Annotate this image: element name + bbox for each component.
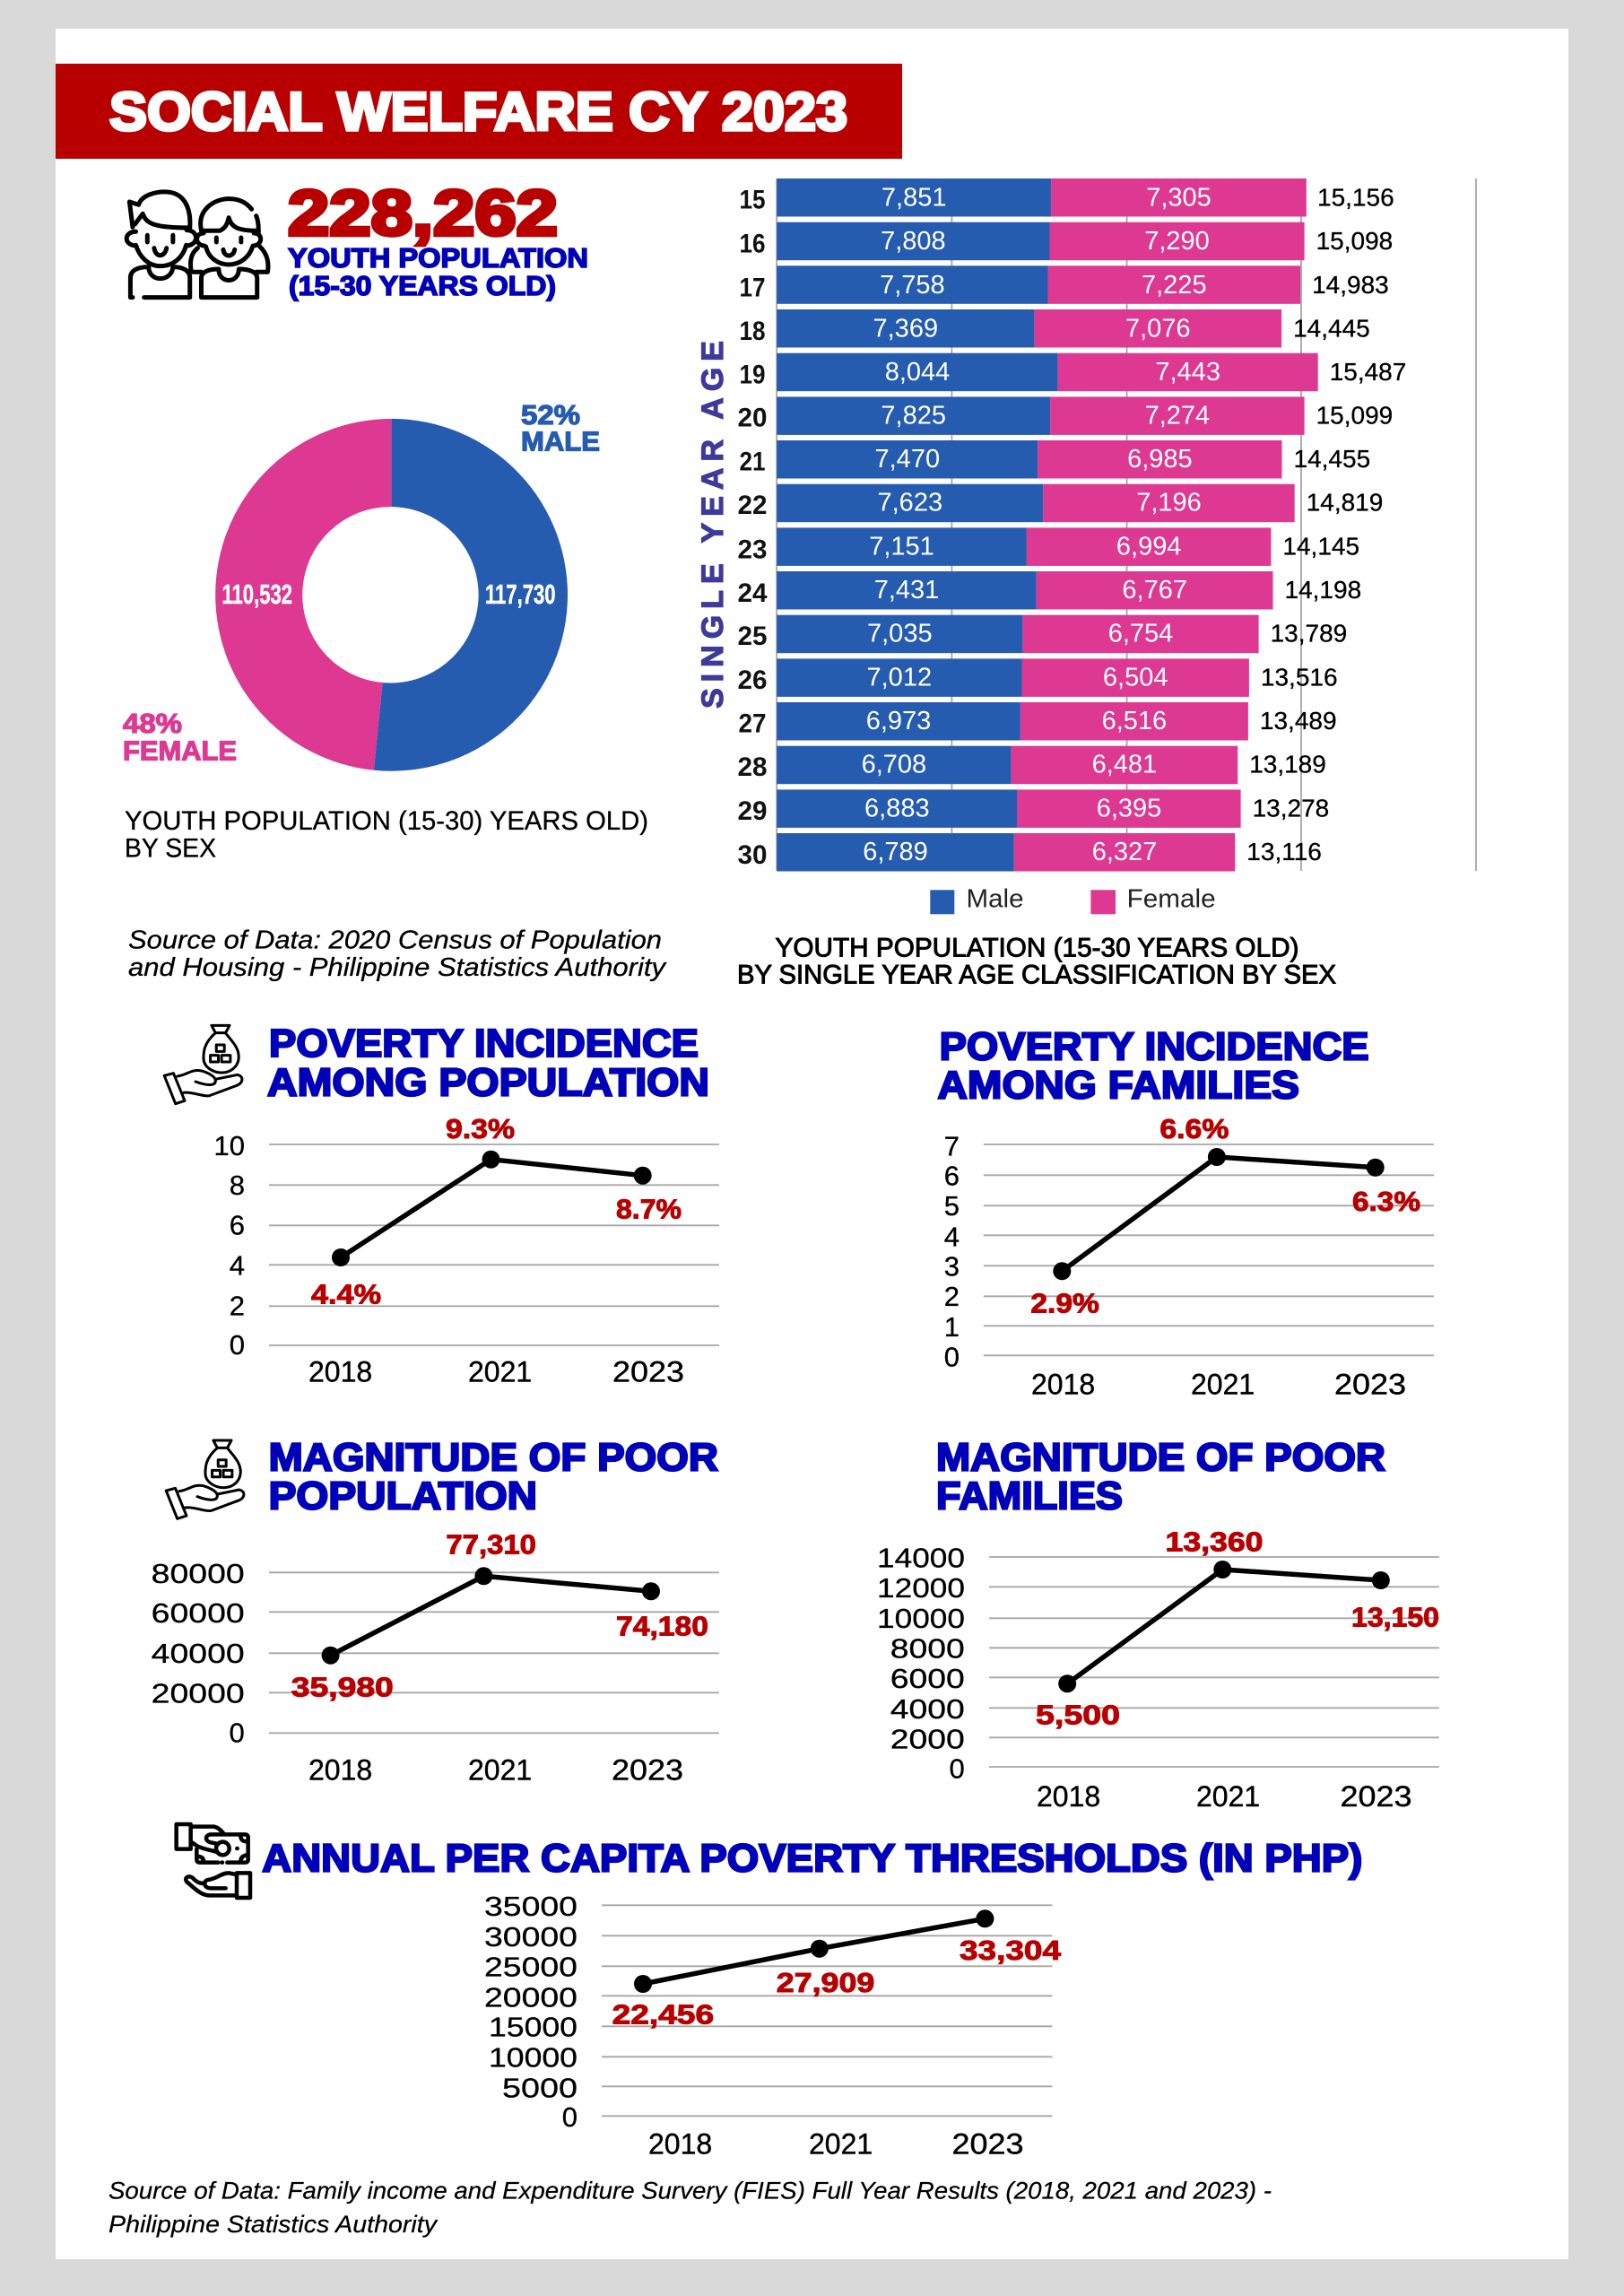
title banner: SOCIAL WELFARE CY 2023 — [109, 82, 847, 142]
heading: POPULATION — [269, 1474, 537, 1518]
data line — [1058, 1561, 1390, 1692]
bar chart legend — [930, 884, 1216, 914]
y axis labels: 35000 — [484, 1891, 578, 1922]
donut chart: youth population by sex — [215, 419, 568, 771]
female segment — [215, 419, 391, 770]
x axis labels — [1031, 1368, 1406, 1400]
age 23: 23 — [737, 535, 768, 564]
y axis labels: 0 — [944, 1341, 960, 1372]
data labels: 2.9% — [1030, 1287, 1099, 1318]
age 18: 14,445 — [1293, 314, 1370, 343]
age 29: 6,395 — [1097, 794, 1161, 822]
data line — [322, 1567, 660, 1665]
heading — [938, 1025, 1369, 1107]
age 22 — [737, 484, 1383, 522]
x axis labels: 2023 — [1334, 1368, 1406, 1400]
x axis labels: 2021 — [1196, 1780, 1260, 1813]
age 21: 7,470 — [875, 445, 940, 474]
x axis labels: 2021 — [468, 1753, 532, 1786]
data labels: 27,909 — [777, 1967, 874, 1998]
y axis labels: 5 — [944, 1190, 960, 1222]
y axis labels: 10000 — [489, 2042, 578, 2074]
y axis labels: 20000 — [152, 1677, 245, 1709]
female value: 110,532 — [222, 578, 292, 610]
age 26: 26 — [737, 665, 768, 695]
age 15: 15,156 — [1317, 183, 1394, 212]
bar chart legend: Male — [967, 884, 1024, 913]
y axis labels: 6 — [944, 1161, 960, 1192]
y axis labels: 14000 — [877, 1543, 965, 1574]
age 29: 13,278 — [1253, 794, 1329, 822]
age 28: 13,189 — [1249, 751, 1326, 778]
data labels: 4.4% — [311, 1278, 381, 1309]
y axis labels: 2 — [230, 1291, 245, 1322]
age 30 — [737, 833, 1322, 872]
x axis labels: 2018 — [648, 2128, 712, 2161]
data labels: 13,150 — [1351, 1601, 1439, 1632]
age 25: 7,035 — [867, 620, 933, 648]
x axis labels: 2023 — [1340, 1780, 1411, 1813]
y axis labels: 4 — [944, 1221, 960, 1252]
age 30: 6,789 — [863, 838, 928, 866]
age 16: 16 — [739, 230, 766, 259]
age 19 — [739, 353, 1406, 391]
icon: hand holding money bag (magnitude) — [166, 1440, 244, 1518]
age 22: 22 — [737, 491, 768, 520]
age 25 — [737, 615, 1347, 653]
age 19: 15,487 — [1330, 358, 1406, 386]
line chart: poverty incidence among families — [938, 1025, 1434, 1400]
age 20: 7,825 — [881, 402, 946, 430]
age 29 — [737, 789, 1329, 828]
donut label: male — [521, 399, 600, 457]
data labels — [1036, 1526, 1439, 1731]
line chart: magnitude of poor population — [152, 1436, 719, 1786]
age 28: 6,481 — [1092, 751, 1157, 779]
x axis labels — [648, 2128, 1024, 2161]
age 25: 6,754 — [1108, 620, 1173, 648]
x axis labels — [308, 1753, 683, 1786]
y axis labels: 25000 — [484, 1951, 578, 1982]
x axis labels: 2023 — [612, 1356, 684, 1388]
data labels: 35,980 — [291, 1672, 394, 1703]
age 28: 28 — [737, 752, 768, 782]
age 26: 13,516 — [1261, 663, 1338, 691]
age 15: 15 — [739, 186, 766, 215]
y axis labels: 2 — [944, 1281, 960, 1312]
icon: two youths — [126, 192, 268, 298]
age 29: 6,883 — [864, 794, 930, 822]
age 19: 7,443 — [1155, 358, 1220, 387]
y axis labels: 8 — [230, 1170, 245, 1201]
y axis labels: 0 — [950, 1752, 965, 1784]
y axis labels: 20000 — [484, 1981, 578, 2013]
data labels: 8.7% — [616, 1193, 682, 1224]
age 23: 7,151 — [869, 532, 934, 561]
axis title: single year age: SINGLE YEAR AGE — [696, 341, 730, 709]
age 15: 7,851 — [881, 183, 946, 212]
y axis labels: 10 — [214, 1130, 245, 1161]
heading: MAGNITUDE OF POOR — [936, 1436, 1385, 1480]
y axis labels: 2000 — [890, 1723, 965, 1754]
age 22: 7,196 — [1136, 489, 1202, 517]
age 23: 6,994 — [1116, 532, 1181, 561]
heading — [936, 1436, 1385, 1518]
total youth population figure: 228,262 — [288, 178, 558, 249]
x axis labels: 2018 — [308, 1753, 372, 1786]
data labels: 13,360 — [1166, 1526, 1263, 1557]
line chart: annual per capita poverty thresholds — [262, 1837, 1362, 2161]
donut label: male: 52% — [521, 399, 580, 430]
x axis labels: 2021 — [809, 2128, 873, 2161]
donut label: female: FEMALE — [123, 735, 237, 766]
icon: hands exchanging money — [177, 1824, 250, 1898]
age 17 — [739, 265, 1389, 304]
line chart: magnitude of poor families — [877, 1436, 1439, 1813]
x axis labels: 2021 — [468, 1356, 532, 1388]
age 17: 7,225 — [1142, 271, 1207, 300]
age 25: 25 — [737, 622, 768, 651]
age 27: 27 — [739, 709, 766, 739]
y axis labels: 6000 — [890, 1663, 965, 1694]
x axis labels: 2023 — [952, 2128, 1024, 2161]
bar chart caption: YOUTH POPULATION (15-30 YEARS OLD) — [775, 934, 1298, 963]
y axis labels: 0 — [229, 1718, 245, 1749]
bar chart caption — [737, 934, 1336, 990]
donut caption: BY SEX — [125, 834, 216, 863]
age 16 — [739, 222, 1393, 260]
age 24: 6,767 — [1122, 576, 1187, 604]
data labels: 74,180 — [616, 1610, 708, 1641]
age 28: 6,708 — [862, 751, 926, 779]
age 22: 14,819 — [1307, 489, 1383, 517]
y axis labels — [152, 1558, 245, 1749]
age 27: 6,973 — [866, 707, 931, 735]
heading: AMONG POPULATION — [267, 1060, 709, 1105]
age 25: 13,789 — [1271, 620, 1347, 648]
age 23 — [737, 527, 1359, 566]
data labels — [1030, 1113, 1420, 1318]
y axis labels: 15000 — [489, 2012, 578, 2043]
source note: FIES: Philippine Statistics Authority — [109, 2211, 439, 2238]
y axis labels: 12000 — [877, 1572, 965, 1604]
line chart: poverty incidence among population — [214, 1022, 719, 1388]
x axis labels: 2018 — [1037, 1780, 1100, 1813]
age 20: 20 — [737, 403, 768, 432]
age 28 — [737, 746, 1326, 784]
age 30: 13,116 — [1246, 838, 1322, 865]
age 20: 7,274 — [1145, 402, 1210, 430]
y axis labels: 4 — [230, 1250, 245, 1282]
data line — [332, 1151, 652, 1266]
y axis labels: 30000 — [484, 1921, 578, 1952]
y axis labels: 8000 — [890, 1632, 965, 1664]
heading: ANNUAL PER CAPITA POVERTY THRESHOLDS (IN PHP) — [262, 1837, 1362, 1881]
heading — [267, 1022, 709, 1105]
source note: census — [128, 926, 667, 982]
y axis labels: 40000 — [152, 1638, 245, 1669]
age 24 — [737, 571, 1361, 610]
source note: FIES — [109, 2178, 1272, 2238]
x axis labels: 2023 — [612, 1753, 683, 1786]
bar chart caption: BY SINGLE YEAR AGE CLASSIFICATION BY SEX — [737, 961, 1336, 990]
age 24: 24 — [737, 578, 768, 608]
y axis labels: 0 — [562, 2101, 578, 2133]
source note: census: and Housing - Philippine Statistics Authority — [128, 953, 667, 982]
age 16: 15,098 — [1316, 227, 1393, 255]
y axis labels — [944, 1130, 960, 1372]
age 18: 7,369 — [873, 314, 938, 343]
age 17: 7,758 — [880, 271, 945, 300]
y axis labels: 60000 — [152, 1597, 245, 1629]
data labels — [311, 1113, 682, 1309]
data line — [1053, 1148, 1385, 1280]
age 24: 7,431 — [874, 576, 939, 604]
age 27: 6,516 — [1102, 707, 1167, 735]
y axis labels: 5000 — [502, 2072, 578, 2103]
y axis labels — [484, 1891, 578, 2133]
male segment — [374, 419, 568, 771]
donut label: female: 48% — [123, 708, 182, 739]
y axis labels: 3 — [944, 1251, 960, 1283]
y axis labels: 80000 — [152, 1558, 245, 1589]
y axis labels — [214, 1130, 245, 1361]
title banner — [56, 64, 902, 159]
data labels: 6.6% — [1159, 1113, 1229, 1144]
age 15: 7,305 — [1146, 183, 1211, 212]
age 21: 6,985 — [1127, 445, 1193, 474]
age 30: 6,327 — [1092, 838, 1157, 866]
age 27 — [739, 702, 1337, 741]
age 18: 18 — [739, 317, 766, 346]
donut label: female — [123, 708, 237, 766]
data labels — [612, 1935, 1062, 2031]
age 24: 14,198 — [1284, 576, 1361, 604]
x axis labels — [1037, 1780, 1411, 1813]
donut caption: YOUTH POPULATION (15-30) YEARS OLD) — [125, 806, 648, 836]
y axis labels: 1 — [944, 1311, 960, 1343]
age 29: 29 — [737, 796, 768, 826]
age 26: 6,504 — [1103, 663, 1168, 691]
heading: AMONG FAMILIES — [938, 1063, 1299, 1107]
x axis labels: 2021 — [1191, 1368, 1255, 1400]
donut label: male: MALE — [521, 425, 600, 457]
age 16: 7,808 — [881, 227, 946, 256]
youth population caption — [288, 242, 588, 301]
age 19: 8,044 — [885, 358, 950, 387]
age 30: 30 — [737, 840, 768, 870]
age 21: 21 — [739, 447, 766, 477]
source note: FIES: Source of Data: Family income and Expenditure Survery (FIES) Full Year Results (2018, 2021 and 2023) - — [109, 2178, 1272, 2205]
youth population caption: (15-30 YEARS OLD) — [289, 270, 556, 301]
age 20 — [737, 396, 1393, 435]
age 23: 14,145 — [1282, 532, 1359, 560]
donut caption — [125, 806, 648, 863]
x axis labels: 2018 — [1031, 1368, 1095, 1400]
data line — [634, 1909, 994, 1993]
y axis labels: 7 — [944, 1130, 960, 1161]
age 18: 7,076 — [1125, 314, 1191, 343]
heading: MAGNITUDE OF POOR — [269, 1436, 718, 1480]
data labels: 9.3% — [446, 1113, 515, 1144]
youth population caption: YOUTH POPULATION — [288, 242, 588, 274]
heading: POVERTY INCIDENCE — [940, 1025, 1369, 1069]
data labels: 6.3% — [1352, 1186, 1420, 1217]
age 16: 7,290 — [1144, 227, 1210, 256]
age 15 — [739, 178, 1394, 217]
age 22: 7,623 — [878, 489, 942, 517]
age 19: 19 — [739, 361, 766, 390]
y axis labels: 4000 — [890, 1693, 965, 1725]
age 20: 15,099 — [1316, 402, 1393, 429]
age 26: 7,012 — [867, 663, 932, 691]
male value: 117,730 — [485, 578, 556, 610]
x axis labels — [308, 1356, 684, 1388]
age 21: 14,455 — [1293, 445, 1370, 473]
data labels: 77,310 — [446, 1529, 536, 1561]
data labels: 22,456 — [612, 1999, 714, 2031]
stacked bar chart: population by age and sex — [737, 178, 1476, 872]
age 17: 17 — [739, 273, 766, 302]
age 17: 14,983 — [1312, 271, 1389, 299]
x axis labels: 2018 — [308, 1356, 372, 1388]
age 27: 13,489 — [1260, 707, 1337, 735]
y axis labels: 10000 — [877, 1603, 965, 1634]
heading — [269, 1436, 718, 1518]
age 18 — [739, 309, 1370, 348]
data labels — [291, 1529, 708, 1703]
age 26 — [737, 658, 1338, 697]
y axis labels — [877, 1543, 965, 1784]
bar chart legend: Female — [1127, 884, 1216, 913]
y axis labels: 6 — [230, 1210, 245, 1241]
heading: FAMILIES — [936, 1474, 1123, 1518]
age 21 — [739, 440, 1370, 479]
data labels: 33,304 — [960, 1935, 1062, 1966]
source note: census: Source of Data: 2020 Census of Population — [128, 926, 662, 954]
data labels: 5,500 — [1036, 1700, 1120, 1731]
icon: hand holding money bag (incidence) — [164, 1025, 242, 1104]
y axis labels: 0 — [230, 1329, 245, 1361]
heading: POVERTY INCIDENCE — [269, 1022, 699, 1065]
